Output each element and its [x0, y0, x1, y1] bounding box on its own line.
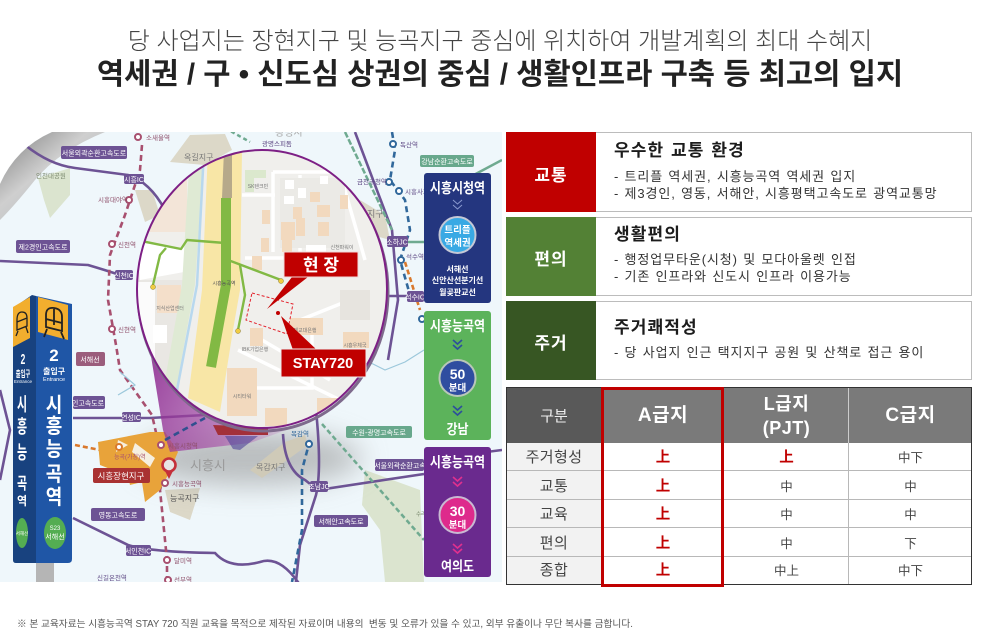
map labels: 능곡(가칭)역	[114, 453, 146, 461]
panel: Siheung City Hall station	[424, 173, 491, 303]
road label tags: 서해안고속도로	[318, 517, 364, 526]
panel: convenience tag	[506, 217, 596, 296]
row: transport: 中	[780, 480, 793, 494]
transport bullets: - 제3경인, 영동, 서해안, 시흥평택고속도로 광역교통망	[614, 186, 938, 200]
green park top	[245, 170, 266, 192]
magnifier circle: 시티타워	[233, 393, 251, 400]
panel: housing tag: 주거	[534, 334, 568, 353]
site pin	[162, 458, 176, 479]
panel: Yeouido 30 minutes: 분대	[449, 519, 466, 531]
map labels: 목감역	[291, 429, 309, 438]
yellow road	[188, 150, 242, 412]
road label tags: 신천IC	[114, 271, 134, 280]
map labels: 달미역	[174, 556, 192, 565]
subway station sign: 곡	[46, 463, 62, 486]
table header: A급지	[638, 404, 688, 426]
subway station sign: 곡	[17, 474, 27, 493]
table header: (PJT)	[763, 418, 810, 438]
subway station sign: 역	[46, 486, 62, 509]
magnifier circle: 시흥우체국	[343, 342, 367, 349]
magnifier circle	[136, 150, 388, 431]
map labels: 시흥대야역	[98, 195, 128, 204]
road label tags: 연성IC	[121, 413, 141, 422]
panel: Gangnam 50 minutes: 시흥능곡역	[430, 317, 485, 334]
map labels: 신현역	[118, 325, 136, 334]
panel: Siheung City Hall station: 시흥시청역	[430, 179, 485, 196]
building blocks	[227, 192, 369, 426]
housing bullets: - 당 사업지 인근 택지지구 공원 및 산책로 접근 용이	[614, 345, 924, 360]
row: education: 교육	[540, 506, 568, 523]
table header: C급지	[885, 404, 936, 426]
comparison table	[506, 387, 972, 585]
magnifier circle: 신천파워이	[330, 244, 354, 251]
panel: Gangnam 50 minutes: 50	[450, 366, 465, 382]
road label tags	[16, 146, 474, 556]
road label tags: 서인천IC	[125, 546, 151, 556]
magnifier circle: 지식산업센터	[156, 305, 184, 312]
table header: 구분	[540, 408, 568, 425]
panel: transport tag: 교통	[534, 166, 568, 184]
table header	[507, 388, 971, 443]
transport bullets	[614, 169, 938, 200]
panel: transport text	[596, 132, 972, 212]
panel: Siheung City Hall station: 역세권	[444, 237, 471, 249]
title	[97, 28, 903, 91]
map labels: 소새울역	[146, 133, 170, 142]
district labels: 시흥시	[190, 458, 226, 473]
panel: Gangnam 50 minutes	[424, 311, 491, 440]
row: education: 中	[780, 508, 793, 522]
location map	[0, 132, 502, 582]
map labels: 시흥사거	[405, 187, 429, 196]
district labels: 지구	[367, 209, 384, 219]
panel: convenience tag: 편의	[534, 250, 568, 269]
callout: STAY720	[281, 316, 366, 377]
row: residential: 주거형성	[526, 449, 582, 466]
panel: Yeouido 30 minutes	[424, 447, 491, 577]
district labels: 옥길지구	[184, 153, 213, 162]
road label tags: 서울외곽순환고속도로	[62, 148, 127, 158]
icon: train	[38, 297, 68, 340]
row: total: 上	[656, 563, 670, 579]
panel: Siheung City Hall station: 월곶판교선	[439, 287, 476, 297]
row: total	[507, 557, 923, 584]
row: convenience: 上	[656, 536, 670, 552]
panel: convenience text	[596, 217, 972, 296]
panel: housing tag	[506, 301, 596, 380]
panel: Gangnam 50 minutes: 강남	[446, 421, 469, 437]
map labels	[36, 133, 431, 584]
rail lines	[108, 145, 167, 582]
road label tags: 시흥장현지구	[98, 471, 145, 481]
river line	[177, 150, 204, 390]
row: transport	[507, 471, 971, 500]
row: convenience: 中	[780, 536, 793, 550]
subway station sign: 출입구	[43, 366, 66, 376]
panel: Yeouido 30 minutes: 30	[450, 503, 465, 519]
road label tags: 소하JC	[386, 238, 408, 246]
subway station sign: 출입구	[16, 367, 30, 379]
row: transport: 中	[904, 480, 917, 494]
subway station sign: 서해선	[16, 530, 28, 537]
river	[118, 350, 424, 395]
magnifier circle: 시흥능곡역	[212, 280, 236, 287]
panel: Siheung City Hall station: 서해선	[446, 264, 469, 274]
convenience bullets: - 행정업무타운(시청) 및 모다아울렛 인접	[614, 252, 857, 267]
subway station sign: Entrance	[43, 377, 65, 383]
road label tags: 조남JC	[308, 482, 330, 491]
subway station sign: 흥	[17, 417, 27, 438]
convenience bullets: - 기존 인프라와 신도시 인프라 이용가능	[614, 268, 852, 284]
row: education: 上	[656, 507, 670, 523]
map labels: 석수역	[406, 252, 424, 261]
subway station sign: 시	[17, 395, 27, 416]
convenience bullets	[614, 252, 857, 284]
row: total: 종합	[540, 562, 568, 579]
callout: STAY720: STAY720	[293, 356, 353, 372]
row: transport: 교통	[540, 478, 568, 494]
panel: housing text	[596, 301, 972, 380]
main headline: 역세권 / 구 • 신도심 상권의 중심 / 생활인프라 구축 등 최고의 입지	[97, 58, 903, 91]
road label tags: 서해선	[80, 355, 100, 364]
station nodes	[109, 134, 171, 583]
row: education: 中	[904, 508, 917, 522]
row: convenience: 편의	[540, 534, 568, 552]
map labels: 선부역	[174, 575, 192, 584]
subway station sign: 능	[17, 443, 27, 464]
subway station sign: 시	[46, 394, 62, 417]
subway station sign: 역	[17, 495, 27, 508]
row: residential	[507, 443, 971, 471]
site dot	[276, 311, 280, 315]
district labels: 광명시	[275, 127, 303, 139]
panel: Siheung City Hall station: 신안산선분기선	[432, 275, 483, 285]
road label tags: 서울외곽순환고속	[374, 461, 426, 470]
row: total: 中下	[898, 564, 923, 578]
road label tags: 영동고속도로	[99, 510, 138, 520]
row: convenience	[507, 528, 971, 557]
row: residential: 上	[656, 450, 670, 466]
highlight box: A grade column	[601, 387, 724, 587]
green subway lines	[136, 198, 281, 367]
map labels: 신천역	[118, 240, 136, 249]
central median	[222, 155, 232, 198]
callout: site: 현 장	[303, 256, 339, 275]
panel: Gangnam 50 minutes: 분대	[449, 382, 466, 394]
magnifier circle: SK텐크빈	[248, 183, 269, 190]
row: residential: 上	[779, 450, 794, 466]
subway station sign: S23	[50, 526, 61, 532]
light green verge	[166, 168, 202, 388]
map labels: 금천구청역	[357, 177, 387, 186]
convenience heading: 생활편의	[614, 225, 681, 244]
housing heading: 주거쾌적성	[614, 318, 698, 337]
map labels: 광명스피돔	[262, 139, 292, 148]
road label tags: 석수IC	[405, 292, 425, 302]
site dashed boundary	[246, 293, 293, 334]
road label tags: 제2경인고속도로	[19, 242, 68, 252]
district labels	[170, 127, 384, 503]
map labels: 수리산	[416, 510, 431, 518]
footnote: ※ 본 교육자료는 시흥능곡역 STAY 720 직원 교육을 목적으로 제작된 자료이며 내용의 변동 및 오류가 있을 수 있고, 외부 유출이나 무단 복사를 금합니다.	[17, 619, 633, 630]
road label tags: 시흥IC	[124, 175, 144, 184]
subway station sign: 2	[21, 352, 26, 368]
soft shadow under magnifier	[138, 430, 362, 486]
subway station sign: Entrance	[14, 379, 33, 384]
map labels: 독산역	[400, 140, 418, 149]
magnifier circle: IBK기업은행	[242, 346, 269, 353]
road label tags: 강남순환고속도로	[421, 157, 473, 166]
neighbourhood areas	[135, 134, 390, 520]
expressways	[0, 132, 502, 590]
white road network	[238, 172, 365, 400]
map labels: 시흥능곡역	[172, 479, 202, 488]
subway station sign: 흥	[46, 415, 62, 438]
district labels: 목감지구	[256, 462, 285, 472]
transport heading: 우수한 교통 환경	[614, 141, 745, 160]
map labels: 시흥시청역	[168, 441, 198, 450]
transport bullets: - 트리플 역세권, 시흥능곡역 역세권 입지	[614, 169, 856, 184]
district labels: 능곡지구	[170, 494, 199, 503]
green park areas	[38, 168, 424, 582]
road label tags: 수원-광명고속도로	[352, 428, 406, 437]
magnified map blocks	[147, 178, 187, 232]
callout: site	[267, 252, 358, 309]
subtitle line: 당 사업지는 장현지구 및 능곡지구 중심에 위치하여 개발계획의 최대 수혜지	[128, 28, 872, 55]
map labels: 신길온천역	[97, 573, 127, 582]
corner shading	[0, 132, 105, 220]
road label tags: 인고속도로	[72, 398, 105, 408]
row: convenience: 下	[904, 536, 917, 550]
row: residential: 中下	[898, 451, 923, 465]
magnifier circle: 제교대은행	[293, 327, 317, 334]
panel: Siheung City Hall station: 트리플	[444, 225, 471, 236]
row: education	[507, 500, 971, 528]
subway station sign	[13, 295, 72, 582]
jangheon district	[98, 432, 178, 502]
row: transport: 上	[656, 478, 670, 494]
subway station sign: 2	[49, 346, 59, 365]
panel: transport tag	[506, 132, 596, 212]
subway station sign: 서해선	[45, 532, 65, 541]
green expressway	[225, 128, 502, 540]
map labels: 인천대공원	[36, 171, 66, 180]
panel: Yeouido 30 minutes: 여의도	[441, 558, 474, 574]
purple beam	[151, 357, 286, 452]
table header: L급지	[764, 394, 809, 414]
subway station sign: 능	[46, 438, 62, 461]
row: total: 中上	[774, 564, 799, 578]
panel: Yeouido 30 minutes: 시흥능곡역	[430, 453, 485, 470]
